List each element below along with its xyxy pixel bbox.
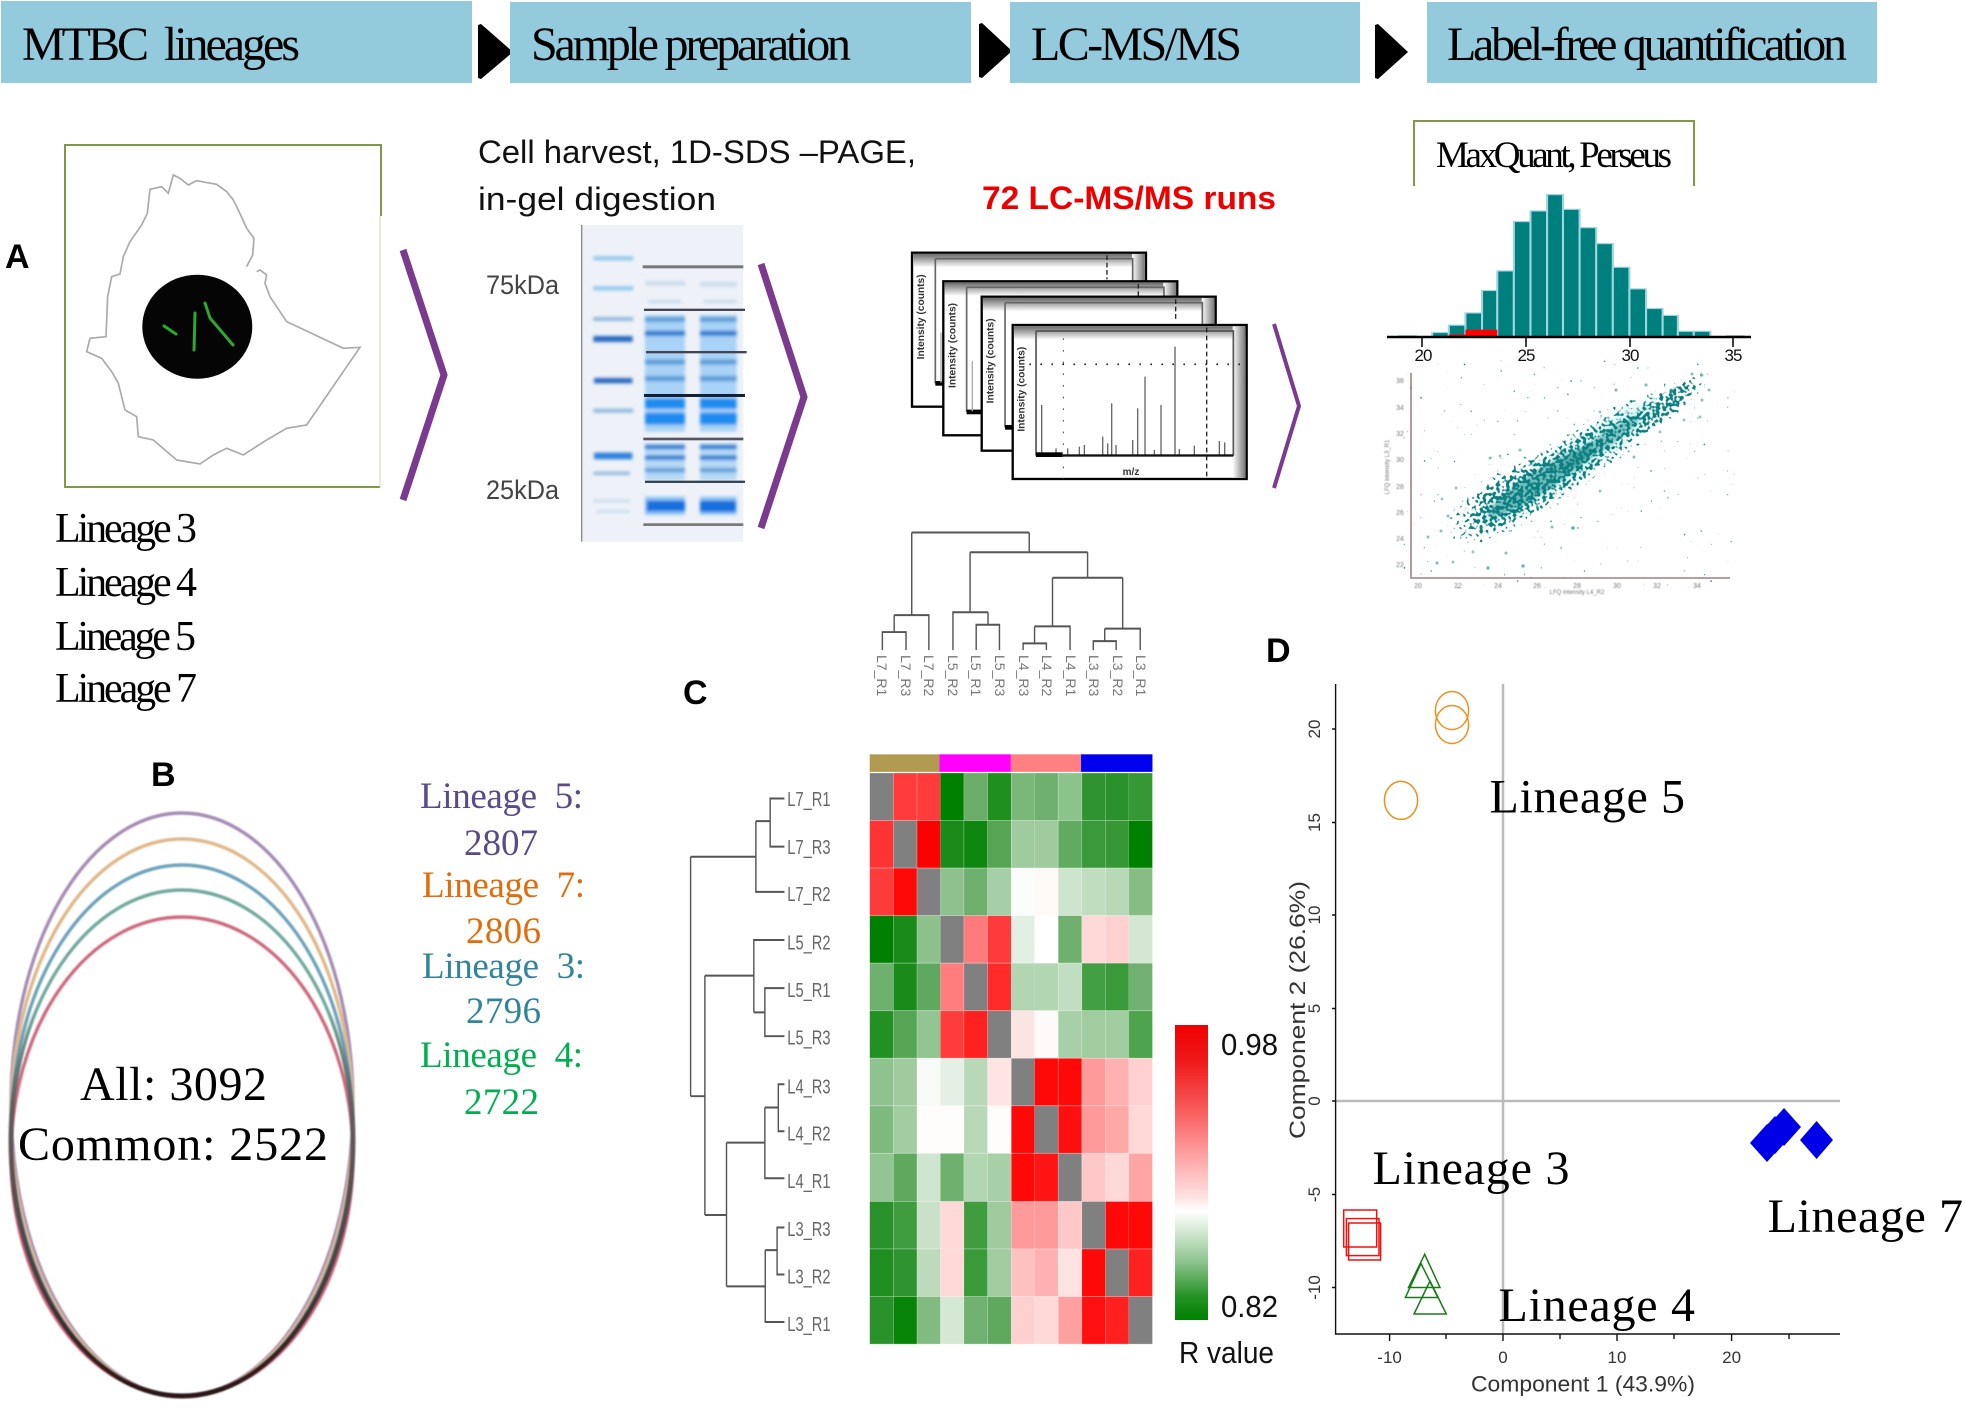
cluster labels: Lineage 5 [1490, 770, 1685, 824]
legend: lineage 5 count: 2807 [464, 823, 538, 864]
legend: R value colour bar: 0.98 [1221, 1027, 1278, 1062]
text: lineage list: Lineage 5 [55, 614, 196, 660]
left dendrogram and row labels: L7_R3 [787, 836, 831, 860]
spectrum frame 4: m/z [1123, 467, 1139, 478]
chart: intensity histogram [1387, 195, 1751, 365]
spectrum frame 1 [912, 253, 1146, 407]
y tick labels: -5 [1305, 1187, 1324, 1202]
column labels: L3_R2 [1110, 655, 1126, 696]
label: 75 kDa: 75kDa [486, 270, 560, 300]
chart: nested ellipses Venn diagram [11, 813, 353, 1396]
chart: intensity histogram: 25 [1518, 346, 1535, 365]
chart: correlation heatmap with dendrograms [691, 532, 1152, 1344]
column labels: L4_R3 [1016, 655, 1032, 696]
icon: map outline [87, 175, 360, 464]
cluster labels: Lineage 7 [1768, 1190, 1963, 1243]
reference lines [1336, 684, 1840, 1334]
header: LC-MS/MS: LC-MS/MS [1031, 18, 1242, 71]
spectrum frame 4 [1013, 325, 1247, 479]
chart: intensity scatter plot [1385, 358, 1730, 596]
left dendrogram and row labels [691, 754, 1152, 1344]
y tick labels: 15 [1305, 813, 1324, 832]
y tick labels: -10 [1305, 1275, 1324, 1300]
legend: R value colour bar: 0.82 [1221, 1289, 1278, 1324]
legend: lineage 7 count: Lineage 7: [422, 865, 585, 906]
y tick labels: 5 [1305, 1004, 1324, 1013]
legend: lineage 3 count [422, 946, 585, 1032]
spectrum frame 2 [943, 281, 1177, 435]
axes and ticks [1332, 684, 1840, 1341]
chart: intensity scatter plot: 32 [1396, 431, 1404, 438]
column labels: L4_R2 [1039, 655, 1055, 696]
x tick labels: -10 [1377, 1348, 1402, 1367]
left dendrogram and row labels: L4_R1 [787, 1170, 831, 1194]
header: MTBC lineages [1, 1, 472, 83]
y axis title: Component 2 (26.6%) [1285, 881, 1310, 1139]
column labels: L3_R3 [1086, 655, 1102, 696]
header: Label-free quantification: Label-free quantification [1447, 18, 1847, 71]
chart: intensity scatter plot: 34 [1693, 583, 1701, 590]
top dendrogram [882, 532, 1140, 650]
markers: lineage 5 circles [1384, 692, 1469, 819]
markers: lineage 4 triangles [1405, 1254, 1446, 1314]
chart: intensity scatter plot: 26 [1533, 583, 1541, 590]
chart: intensity scatter plot: 28 [1396, 484, 1404, 491]
icon: culture dish [142, 275, 252, 379]
chart: intensity scatter plot: 30 [1396, 457, 1404, 464]
arrow: chevron 3 [1274, 324, 1299, 488]
cluster labels: Lineage 3 [1372, 1142, 1570, 1195]
text: all and common counts: All: 3092 [80, 1058, 267, 1111]
y tick labels: 0 [1305, 1096, 1324, 1106]
left dendrogram and row labels: L5_R1 [787, 979, 831, 1003]
legend: lineage 3 count: 2796 [466, 991, 541, 1032]
arrow: chevron 2 [761, 264, 804, 528]
header: Sample preparation: Sample preparation [531, 18, 851, 71]
chart: intensity histogram: 30 [1622, 346, 1639, 365]
column labels: L4_R1 [1063, 655, 1079, 696]
text: cell harvest: Cell harvest, 1D-SDS –PAGE, [478, 134, 916, 170]
arrow: header 3 to 4 [1375, 24, 1408, 79]
text: all and common counts [18, 1058, 328, 1171]
chart: intensity scatter plot: 22 [1396, 562, 1404, 569]
panel label B: B [151, 756, 176, 794]
x tick labels: 10 [1608, 1348, 1626, 1367]
chart: intensity scatter plot: 22 [1454, 583, 1462, 590]
legend: lineage 7 count: 2806 [466, 911, 541, 952]
cluster labels [1372, 770, 1963, 1332]
arrow: header 1 to 2 [478, 24, 513, 79]
chart: intensity scatter plot: 30 [1613, 583, 1621, 590]
column labels: L3_R1 [1133, 655, 1149, 696]
legend: lineage 4 count [420, 1035, 583, 1123]
column labels: L7_R1 [874, 655, 890, 696]
markers: lineage 3 squares [1344, 1210, 1381, 1260]
column labels: L5_R1 [968, 655, 984, 696]
markers: lineage 7 diamonds [1750, 1108, 1833, 1162]
header: Label-free quantification [1427, 2, 1877, 83]
legend: lineage 5 count: Lineage 5: [420, 776, 583, 817]
legend: lineage 4 count: Lineage 4: [420, 1035, 583, 1076]
left dendrogram and row labels: L4_R3 [787, 1075, 831, 1099]
y tick labels: 10 [1305, 906, 1324, 924]
header: LC-MS/MS [1010, 2, 1360, 83]
box: MaxQuant, Perseus [1414, 121, 1694, 186]
spectrum frame 2: Intensity (counts) [947, 303, 958, 388]
text: 72 LC-MS/MS runs: 72 LC-MS/MS runs [982, 180, 1276, 216]
x axis title: Component 1 (43.9%) [1471, 1372, 1695, 1396]
left dendrogram and row labels: L3_R1 [787, 1313, 831, 1337]
text: all and common counts: Common: 2522 [18, 1118, 328, 1171]
arrow: header 2 to 3 [979, 23, 1012, 78]
panel label C: C [683, 674, 708, 712]
left dendrogram and row labels: L5_R2 [787, 931, 831, 955]
cluster labels: Lineage 4 [1498, 1279, 1695, 1332]
chart: intensity scatter plot: 32 [1653, 583, 1661, 590]
x tick labels: 20 [1722, 1348, 1741, 1367]
group colour strip [870, 754, 1152, 772]
panel: Ethiopia map with culture dish [65, 145, 381, 487]
column labels: L5_R2 [945, 655, 961, 696]
left dendrogram and row labels: L7_R1 [787, 787, 831, 812]
label: 25 kDa: 25kDa [486, 475, 560, 505]
spectrum frame 4: Intensity (counts) [1017, 347, 1028, 432]
chart: intensity scatter plot: 34 [1396, 405, 1404, 412]
chart: intensity scatter plot: 24 [1396, 536, 1404, 543]
x tick labels [1377, 1348, 1741, 1367]
chart: intensity scatter plot: 20 [1414, 583, 1422, 590]
legend: lineage 3 count: Lineage 3: [422, 946, 585, 987]
chart: intensity scatter plot: 24 [1494, 583, 1502, 590]
arrow: chevron 1 [403, 250, 444, 500]
spectrum frame 3 [982, 297, 1216, 451]
column labels [874, 655, 1149, 696]
panel label A: A [5, 238, 30, 276]
chart: intensity scatter plot: 36 [1396, 378, 1404, 385]
chart: intensity histogram: 20 [1415, 346, 1432, 365]
y tick labels: 20 [1305, 720, 1324, 738]
chart: PCA scatter plot [1285, 684, 1963, 1396]
chart: SDS-PAGE gel [582, 225, 747, 542]
column labels: L5_R3 [992, 655, 1008, 696]
left dendrogram and row labels: L5_R3 [787, 1026, 831, 1050]
legend: lineage 5 count [420, 776, 583, 864]
chart: intensity scatter plot: 26 [1396, 510, 1404, 517]
left dendrogram and row labels: L7_R2 [787, 883, 831, 907]
x tick labels: 0 [1498, 1348, 1508, 1367]
chart: intensity scatter plot: 28 [1573, 583, 1581, 590]
text: lineage list: Lineage 3 [55, 506, 197, 552]
text: lineage list [55, 506, 197, 712]
panel: stacked mass spectra [912, 253, 1247, 479]
text: lineage list: Lineage 7 [55, 666, 197, 712]
heatmap cells [870, 773, 1152, 1344]
chart: intensity scatter plot: LFQ intensity L4_R2 [1550, 590, 1605, 596]
text: lineage list: Lineage 4 [55, 560, 197, 606]
header: Sample preparation [510, 2, 971, 83]
left dendrogram and row labels: L3_R2 [787, 1265, 831, 1289]
chart: intensity histogram: 35 [1725, 346, 1742, 365]
legend: lineage 7 count [422, 865, 585, 952]
panel label D: D [1266, 632, 1291, 670]
left dendrogram and row labels: L3_R3 [787, 1218, 831, 1242]
spectrum frame 3: Intensity (counts) [986, 318, 997, 403]
chart: intensity scatter plot: LFQ intensity L3_R1 [1385, 439, 1391, 494]
text: cell harvest [478, 134, 916, 217]
left dendrogram and row labels: L4_R2 [787, 1122, 831, 1146]
y tick labels [1305, 720, 1324, 1300]
spectrum frame 1: Intensity (counts) [916, 274, 927, 359]
legend: lineage 4 count: 2722 [464, 1082, 539, 1123]
legend: R value colour bar: R value [1179, 1335, 1274, 1370]
column labels: L7_R3 [898, 655, 914, 696]
column labels: L7_R2 [921, 655, 937, 696]
text: cell harvest: in-gel digestion [478, 181, 716, 217]
header: MTBC lineages: MTBC lineages [22, 18, 300, 71]
box: MaxQuant, Perseus: MaxQuant, Perseus [1436, 135, 1672, 176]
legend: R value colour bar [1175, 1025, 1278, 1370]
